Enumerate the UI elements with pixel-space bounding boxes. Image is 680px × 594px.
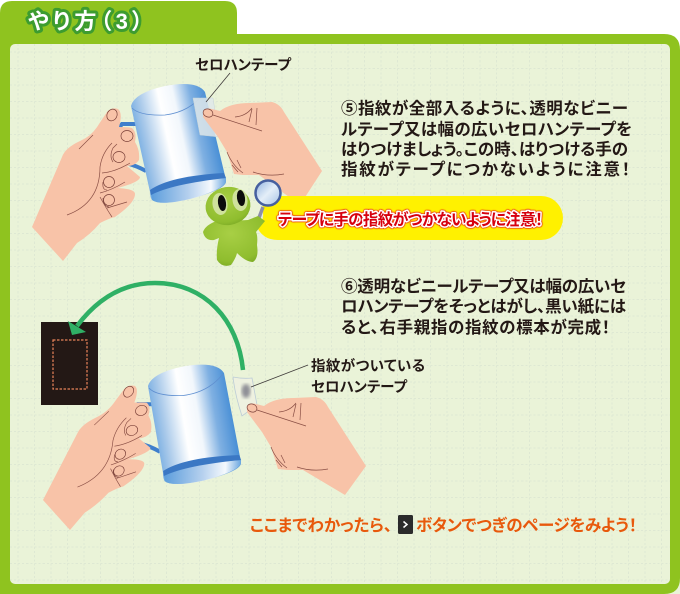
instruction 6: ロハンテープをそっとはがし、黒い紙には <box>341 296 626 316</box>
black paper <box>41 322 98 405</box>
leader line <box>251 365 308 387</box>
mug rim <box>132 93 204 115</box>
tape <box>193 98 219 137</box>
label: cellophane tape: セロハンテープ <box>195 57 292 74</box>
label: tape with fingerprint: セロハンテープ <box>311 379 408 396</box>
mug handle <box>116 124 146 171</box>
mug body <box>131 84 226 203</box>
illustration: upper hands and mug <box>32 73 322 261</box>
leader line <box>206 73 230 102</box>
instruction 6: ると、右手親指の指紋の標本が完成！ <box>341 317 610 337</box>
label: tape with fingerprint <box>311 357 425 396</box>
footer note: ボタンでつぎのページをみよう！ <box>416 515 637 535</box>
instruction 5: ルテープ又は幅の広いセロハンテープを <box>341 120 632 139</box>
left hand upper <box>32 108 140 261</box>
right hand lower <box>246 397 366 495</box>
instruction 5: ⑤指紋が全部入るように、透明なビニー <box>341 98 628 118</box>
instruction 6: ⑥透明なビニールテープ又は幅の広いセ <box>341 276 626 296</box>
left hand lines <box>67 107 133 217</box>
green arrow <box>68 283 243 370</box>
mascot with magnifier <box>203 180 280 266</box>
lower mug <box>128 364 246 485</box>
left hand lower <box>40 383 156 532</box>
mug band <box>150 173 226 195</box>
instruction 5 <box>341 98 632 179</box>
instruction 5: はりつけましょう。この時、はりつける手の <box>341 139 628 159</box>
title: やり方（3） <box>27 9 143 34</box>
instruction 5: 指紋がテープにつかないように注意！ <box>341 159 630 179</box>
illustration: lower hands and mug <box>40 364 366 532</box>
right hand upper <box>203 102 322 205</box>
instruction 6 <box>341 276 626 337</box>
fingerprint smudge <box>242 384 250 398</box>
footer note: ここまでわかったら、 <box>250 516 392 535</box>
right hand lines <box>202 108 284 175</box>
callout text: テープに手の指紋がつかないように注意！ <box>278 210 543 229</box>
fingerprint tape <box>233 377 257 416</box>
label: tape with fingerprint: 指紋がついている <box>311 357 425 375</box>
mug base <box>151 178 226 203</box>
footer note <box>250 515 637 535</box>
callout: yellow bubble <box>256 196 563 240</box>
